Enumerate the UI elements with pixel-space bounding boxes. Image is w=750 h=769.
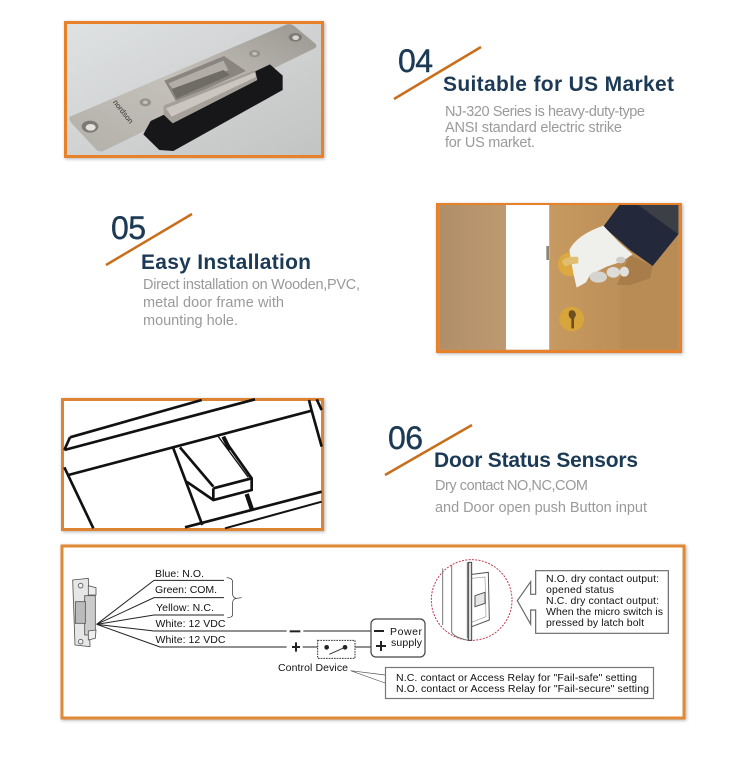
- wire labels: Control Device: [278, 662, 348, 674]
- title: Suitable for US Market: Suitable for US Market: [443, 73, 674, 96]
- callout: dry contact output: opened status: [546, 584, 614, 596]
- number 06: 06: [388, 420, 423, 456]
- number 04: 04: [398, 43, 433, 79]
- number 05: 05: [111, 210, 146, 246]
- accent stroke: [106, 214, 192, 265]
- opening: [164, 56, 246, 102]
- title: Easy Installation: Easy Installation: [141, 251, 311, 274]
- strike plate: [69, 24, 316, 151]
- lower lock rosette: [559, 307, 584, 331]
- description: NJ-320 Series is heavy-duty-type: [445, 104, 645, 120]
- wire labels: Blue: N.O.: [155, 568, 204, 580]
- description: [445, 104, 645, 151]
- key: [562, 257, 578, 267]
- wire labels: Yellow: N.C.: [156, 602, 214, 614]
- wires: [97, 578, 372, 647]
- screws: [82, 121, 98, 133]
- latch: [163, 70, 257, 123]
- description: and Door open push Button input: [435, 500, 647, 516]
- detail circle: micro switch: [431, 560, 512, 640]
- power supply box: supply: [391, 637, 423, 649]
- panel: wiring diagram: [62, 546, 684, 718]
- icon: strike front view: [73, 578, 96, 647]
- wire labels: Green: COM.: [155, 584, 217, 596]
- callout: dry contact output: pressed by latch bolt: [546, 617, 644, 629]
- accent stroke: [394, 47, 481, 99]
- description: mounting hole.: [143, 313, 238, 329]
- heading block 05: [106, 210, 360, 329]
- fingers: [590, 271, 607, 283]
- panel: electric strike photo: nordson: [111, 98, 135, 125]
- description: metal door frame with: [143, 295, 284, 311]
- wiring: strike and cables: [73, 578, 385, 683]
- callout: dry contact output: When the micro switch is: [546, 606, 663, 618]
- power supply box: [371, 619, 425, 657]
- title: Door Status Sensors: Door Status Sensors: [434, 449, 638, 472]
- power supply box: Power: [390, 626, 422, 638]
- callout: relay setting: N.O. contact or Access Relay for "Fail-secure" setting: [396, 683, 649, 695]
- black body: [143, 64, 283, 151]
- description: Direct installation on Wooden,PVC,: [143, 277, 360, 293]
- panel: door photo: [438, 204, 680, 352]
- panel: electric strike photo: [66, 22, 322, 156]
- upper lock rosette: [558, 252, 582, 276]
- gloved hand: [569, 226, 633, 288]
- wire labels: White: 12 VDC: [156, 634, 226, 646]
- polarity marks: [290, 630, 300, 632]
- description: [143, 277, 360, 329]
- description: for US market.: [445, 135, 535, 151]
- wire labels: [155, 568, 348, 674]
- callout: dry contact output: N.O. dry contact output:: [546, 573, 659, 585]
- description: [435, 478, 647, 516]
- description: ANSI standard electric strike: [445, 120, 622, 136]
- panel: door sensor line drawing: [62, 399, 322, 530]
- sleeve: [603, 205, 678, 266]
- callout: relay setting: N.C. contact or Access Relay for "Fail-safe" setting: [396, 672, 637, 684]
- heading block 04: [394, 43, 674, 151]
- hand shadow: [617, 255, 653, 285]
- callout: dry contact output: [517, 571, 668, 633]
- switch box: [318, 640, 355, 658]
- callout: dry contact output: N.C. dry contact output:: [546, 595, 659, 607]
- callout leader: [351, 671, 385, 683]
- description: Dry contact NO,NC,COM: [435, 478, 588, 494]
- heading block 06: [385, 420, 647, 516]
- wire labels: White: 12 VDC: [156, 618, 226, 630]
- callout: relay setting: [386, 668, 654, 698]
- accent stroke: [385, 425, 472, 475]
